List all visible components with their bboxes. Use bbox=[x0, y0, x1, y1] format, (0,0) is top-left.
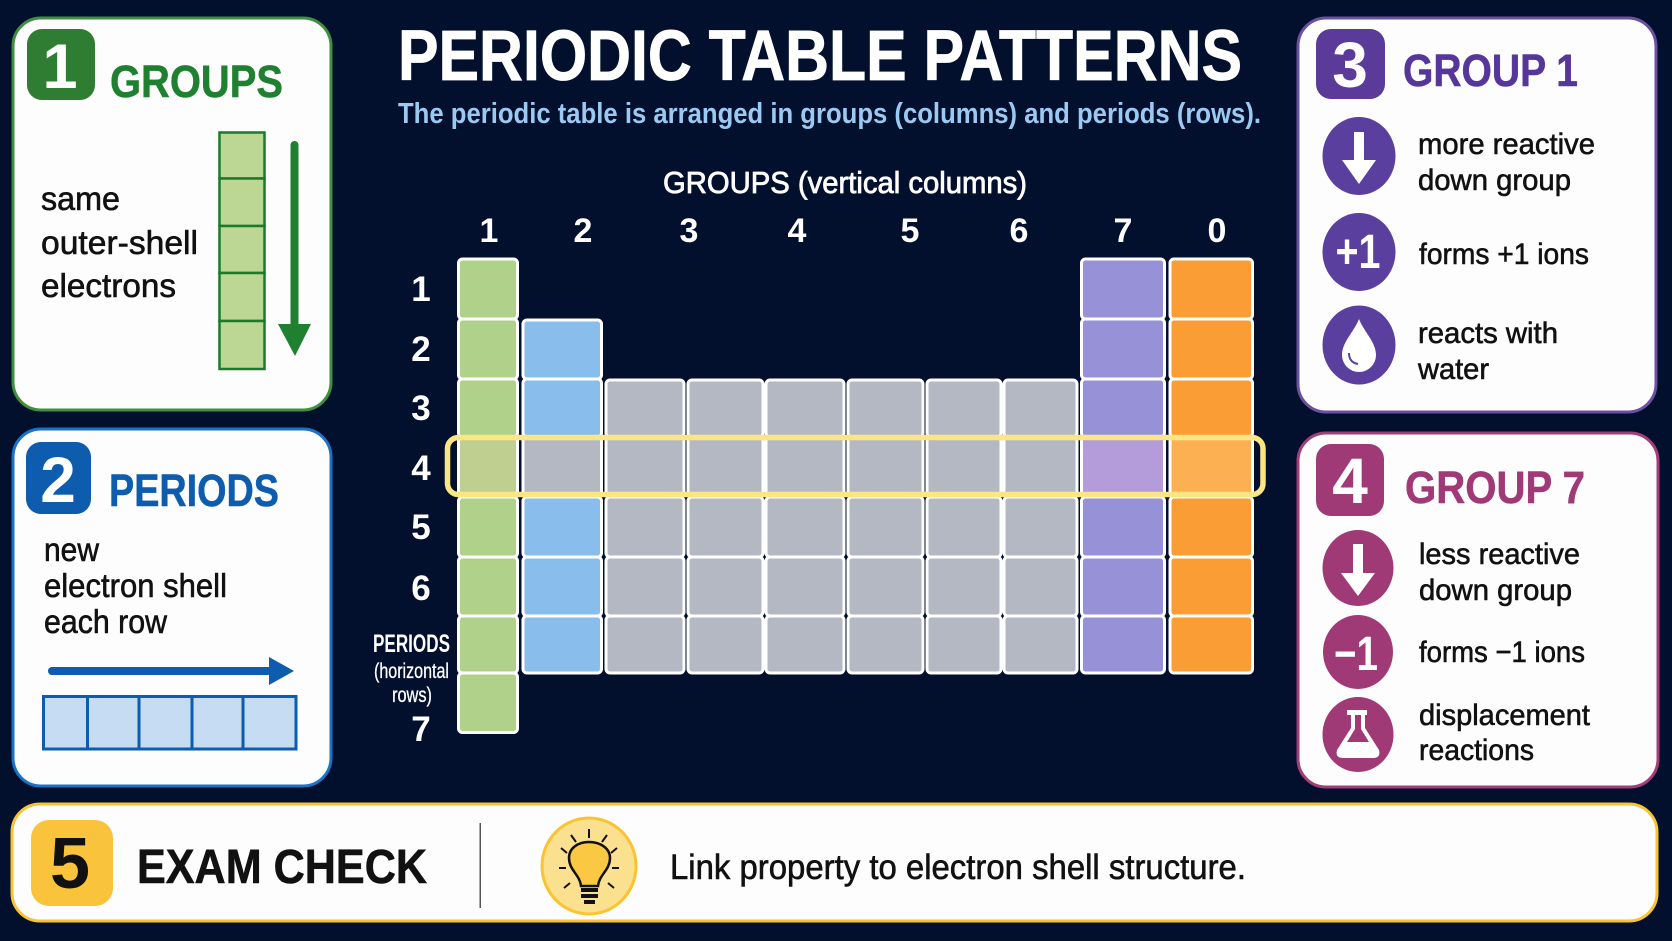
column: group 2 blue bbox=[523, 320, 602, 673]
row numbers: 1 bbox=[411, 270, 431, 309]
transition block grey bbox=[606, 380, 1077, 673]
text: new electron shell each row: new bbox=[44, 531, 99, 568]
column numbers: 3 bbox=[680, 212, 698, 250]
arrow: down bbox=[278, 141, 311, 356]
text: new electron shell each row: electron shell bbox=[44, 567, 227, 604]
subtitle: The periodic table is arranged in groups (columns) and periods (rows). bbox=[398, 98, 1261, 130]
arrow: right bbox=[48, 657, 294, 685]
badge 4: 4 bbox=[1332, 445, 1368, 517]
text: more reactive down group: down group bbox=[1418, 164, 1571, 197]
column numbers: 7 bbox=[1114, 212, 1132, 250]
icon: water drop bbox=[1322, 306, 1396, 384]
title: PERIODIC TABLE PATTERNS bbox=[398, 17, 1242, 96]
column numbers: 2 bbox=[574, 212, 592, 250]
horizontal row diagram bbox=[44, 696, 296, 749]
row numbers: 7 bbox=[411, 710, 431, 749]
text: more reactive down group bbox=[1418, 128, 1595, 197]
column numbers: 6 bbox=[1010, 212, 1028, 250]
row numbers: 3 bbox=[411, 389, 431, 428]
axis title: groups: GROUPS (vertical columns) bbox=[663, 165, 1027, 200]
icon: light bulb bbox=[542, 818, 636, 914]
text: less reactive down group: less reactive bbox=[1419, 538, 1580, 571]
text: same outer-shell electrons bbox=[41, 180, 198, 304]
badge 3 bbox=[1316, 29, 1385, 101]
text: displacement reactions: displacement bbox=[1419, 699, 1591, 732]
badge 5: 5 bbox=[50, 824, 90, 904]
text: link property: Link property to electron shell structure. bbox=[670, 848, 1246, 887]
panel: group 7 bbox=[1298, 433, 1658, 787]
column: group 0 orange bbox=[1170, 259, 1252, 673]
text: less reactive down group: down group bbox=[1419, 574, 1572, 607]
heading: group 1: GROUP 1 bbox=[1403, 45, 1578, 96]
axis title: periods bbox=[373, 630, 450, 707]
row numbers: 2 bbox=[411, 330, 431, 369]
chart: periodic table grid bbox=[373, 165, 1263, 749]
badge 1: 1 bbox=[42, 32, 78, 102]
icon: +1 bbox=[1322, 213, 1396, 291]
text: new electron shell each row: each row bbox=[44, 603, 167, 640]
row numbers: 5 bbox=[411, 508, 431, 547]
badge 5 bbox=[31, 820, 113, 906]
badge 3: 3 bbox=[1332, 29, 1368, 101]
panel: exam check bbox=[12, 804, 1657, 921]
panel: groups bbox=[13, 18, 331, 410]
icon: -1 bbox=[1323, 615, 1393, 689]
heading: exam check: EXAM CHECK bbox=[137, 841, 427, 894]
badge 2: 2 bbox=[40, 444, 76, 516]
text: same outer-shell electrons: electrons bbox=[41, 267, 176, 304]
icon: down arrow bbox=[1322, 530, 1394, 606]
axis title: periods: rows) bbox=[392, 684, 432, 707]
column numbers: 0 bbox=[1208, 212, 1226, 250]
icon: flask bbox=[1322, 697, 1394, 772]
text: reacts with water: reacts with bbox=[1418, 317, 1558, 350]
badge 1 bbox=[27, 29, 95, 102]
text: same outer-shell electrons: same bbox=[41, 180, 120, 217]
icon: -1: −1 bbox=[1334, 628, 1378, 681]
axis title: periods: PERIODS bbox=[373, 630, 450, 658]
column: group 7 purple bbox=[1082, 259, 1164, 673]
column numbers: 5 bbox=[901, 212, 919, 250]
axis title: periods: (horizontal bbox=[374, 660, 449, 683]
text: forms +1 ions: forms +1 ions bbox=[1419, 238, 1589, 271]
badge 4 bbox=[1316, 444, 1384, 517]
text: reacts with water bbox=[1417, 317, 1558, 386]
text: forms -1 ions: forms −1 ions bbox=[1419, 636, 1585, 669]
column numbers: 4 bbox=[788, 212, 807, 250]
text: more reactive down group: more reactive bbox=[1418, 128, 1595, 161]
highlight: period 4 bbox=[448, 438, 1263, 494]
row numbers: 4 bbox=[411, 449, 431, 488]
badge 2 bbox=[26, 442, 91, 516]
vertical column diagram bbox=[220, 132, 264, 369]
column: group 1 green bbox=[458, 259, 518, 732]
column numbers: 1 bbox=[480, 212, 498, 250]
text: same outer-shell electrons: outer-shell bbox=[41, 224, 198, 261]
heading: groups: GROUPS bbox=[110, 56, 283, 107]
column numbers bbox=[480, 212, 1226, 250]
text: less reactive down group bbox=[1419, 538, 1580, 607]
text: new electron shell each row bbox=[44, 531, 227, 640]
heading: group 7: GROUP 7 bbox=[1405, 462, 1585, 513]
text: displacement reactions: reactions bbox=[1419, 734, 1534, 767]
row numbers bbox=[411, 270, 431, 749]
icon: +1: +1 bbox=[1336, 226, 1380, 279]
row numbers: 6 bbox=[411, 569, 431, 608]
text: reacts with water: water bbox=[1417, 353, 1489, 386]
icon: down arrow bbox=[1322, 117, 1396, 195]
text: displacement reactions bbox=[1419, 699, 1591, 767]
heading: periods: PERIODS bbox=[109, 465, 279, 516]
panel: periods bbox=[13, 429, 331, 786]
panel: group 1 bbox=[1298, 18, 1656, 412]
